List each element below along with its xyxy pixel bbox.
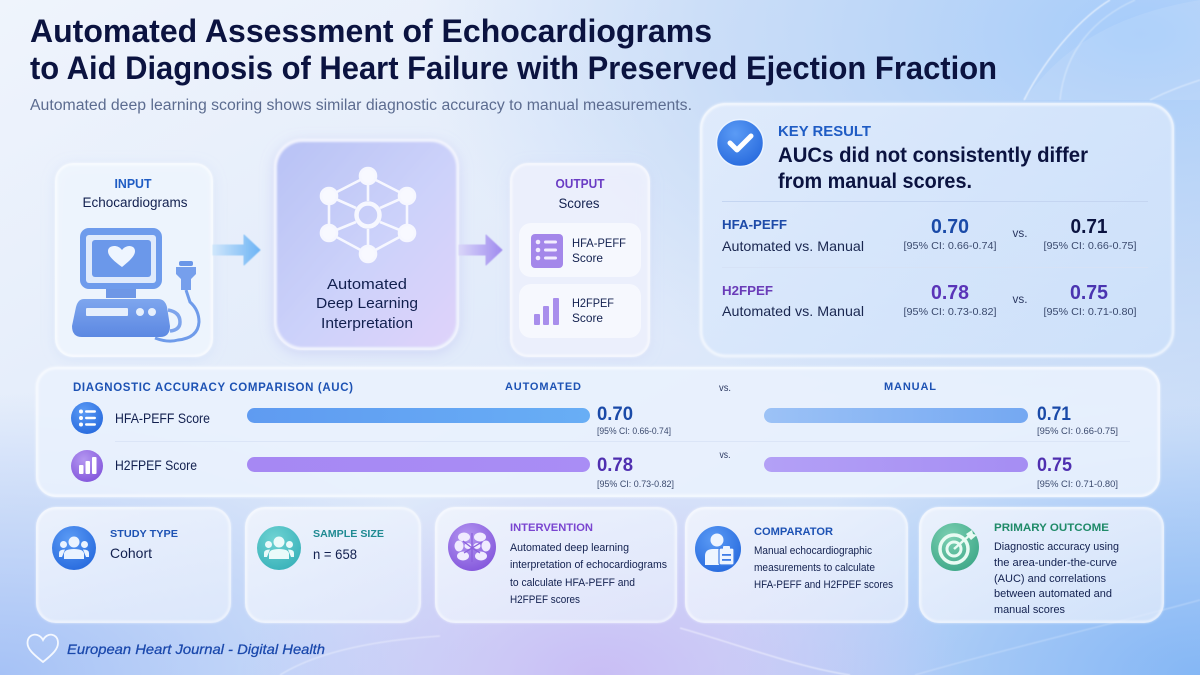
column heading: automated: AUTOMATED: [505, 381, 581, 393]
interpretation label: Deep Learning: [316, 295, 418, 312]
row: H2FPEF score bars: H2FPEF Score: [115, 458, 197, 473]
icon: people: [257, 526, 301, 570]
card: study type: Cohort: [110, 545, 152, 561]
row: HFA-PEFF score bars: [95% CI: 0.66-0.75]: [1037, 426, 1118, 437]
footer: journal: [28, 635, 325, 662]
icon: target: [931, 523, 979, 571]
key result statement: AUCs did not consistently differ: [778, 144, 1088, 167]
row: H2FPEF: [722, 282, 1137, 319]
title: [30, 13, 997, 86]
card: intervention: to calculate HFA-PEFF and: [510, 577, 635, 589]
arrow: input to interpretation: [213, 235, 260, 265]
row: HFA-PEFF: [95% CI: 0.66-0.75]: [1044, 240, 1137, 252]
card: comparator: Manual echocardiographic: [754, 545, 872, 557]
interpretation label: [316, 276, 418, 332]
icon: list: [71, 402, 103, 434]
row: H2FPEF: vs.: [1012, 292, 1028, 306]
panel: automated deep learning interpretation: [274, 139, 459, 353]
card: sample size: n = 658: [313, 546, 357, 562]
row: H2FPEF: Automated vs. Manual: [722, 303, 864, 319]
row: HFA-PEFF score bars: 0.71: [1037, 404, 1071, 425]
card: comparator: HFA-PEFF and H2FPEF scores: [754, 579, 893, 591]
row: HFA-PEFF score bars: [71, 402, 1118, 437]
card: primary outcome: manual scores: [994, 604, 1065, 616]
panel: diagnostic accuracy comparison: [36, 367, 1160, 497]
row: H2FPEF: 0.75: [1070, 282, 1108, 304]
output: H2FPEF score card: [519, 284, 641, 338]
column heading: manual: MANUAL: [884, 381, 936, 393]
row: H2FPEF: [95% CI: 0.71-0.80]: [1044, 306, 1137, 318]
output label: OUTPUT: [556, 177, 605, 191]
row: HFA-PEFF score bars: 0.70: [597, 404, 633, 425]
output: HFA-PEFF score card: HFA-PEFF: [572, 236, 626, 250]
card: intervention: H2FPEF scores: [510, 594, 580, 606]
row: H2FPEF score bars: [95% CI: 0.73-0.82]: [597, 479, 674, 490]
card: primary outcome: Diagnostic accuracy using: [994, 541, 1119, 553]
row: H2FPEF score bars: 0.75: [1037, 455, 1072, 476]
output: H2FPEF score card: H2FPEF: [572, 296, 614, 310]
row: H2FPEF score bars: [95% CI: 0.71-0.80]: [1037, 479, 1118, 490]
card: primary outcome: the area-under-the-curve: [994, 557, 1117, 569]
card: intervention: INTERVENTION: [510, 522, 593, 534]
row: H2FPEF score bars: [71, 449, 1118, 490]
interpretation label: Automated: [327, 276, 407, 293]
row: H2FPEF score bars: 0.78: [597, 455, 633, 476]
comparison heading: DIAGNOSTIC ACCURACY COMPARISON (AUC): [73, 382, 353, 394]
row: HFA-PEFF: [722, 216, 1137, 254]
card: primary outcome: PRIMARY OUTCOME: [994, 522, 1109, 534]
row: H2FPEF: H2FPEF: [722, 283, 773, 298]
card: intervention: interpretation of echocardiograms: [510, 559, 667, 571]
card: primary outcome: between automated and: [994, 588, 1112, 600]
row: H2FPEF: 0.78: [931, 282, 969, 304]
card: primary outcome: (AUC) and correlations: [994, 573, 1107, 585]
row: HFA-PEFF: HFA-PEFF: [722, 217, 787, 232]
output: H2FPEF score card: Score: [572, 311, 603, 325]
arrow: interpretation to output: [459, 235, 502, 265]
row: H2FPEF: [95% CI: 0.73-0.82]: [904, 306, 997, 318]
card: intervention: [435, 507, 677, 623]
card: sample size: SAMPLE SIZE: [313, 528, 384, 540]
input name: Echocardiograms: [82, 195, 188, 210]
title: to Aid Diagnosis of Heart Failure with Preserved Ejection Fraction: [30, 50, 997, 86]
icon: check mark: [716, 120, 764, 166]
key result label: KEY RESULT: [778, 124, 871, 140]
card: comparator: COMPARATOR: [754, 526, 833, 538]
key result statement: [778, 144, 1088, 193]
row: HFA-PEFF: Automated vs. Manual: [722, 238, 864, 254]
icon: clinician with clipboard: [695, 526, 741, 572]
row: H2FPEF score bars: vs.: [720, 449, 730, 461]
column separator: vs: vs.: [719, 382, 731, 394]
panel: key result: [700, 103, 1174, 357]
output: HFA-PEFF score card: [519, 223, 641, 277]
row: HFA-PEFF score bars: HFA-PEFF Score: [115, 411, 210, 426]
input label: INPUT: [114, 177, 152, 191]
key result statement: from manual scores.: [778, 170, 972, 193]
icon: bars: [71, 450, 103, 482]
row: HFA-PEFF: 0.71: [1070, 216, 1108, 238]
interpretation label: Interpretation: [321, 315, 413, 332]
card: intervention: Automated deep learning: [510, 542, 629, 554]
card: study type: [36, 507, 231, 623]
card: comparator: measurements to calculate: [754, 562, 875, 574]
subtitle: Automated deep learning scoring shows similar diagnostic accuracy to manual measurements.: [30, 97, 692, 114]
card: study type: STUDY TYPE: [110, 528, 178, 540]
footer: journal: European Heart Journal - Digital Health: [67, 641, 325, 657]
title: Automated Assessment of Echocardiograms: [30, 13, 712, 49]
row: HFA-PEFF score bars: [95% CI: 0.66-0.74]: [597, 426, 671, 437]
card: sample size: [245, 507, 421, 623]
icon: ultrasound machine: [72, 228, 199, 341]
icon: heart outline: [28, 635, 58, 662]
icon: neural network: [321, 168, 415, 262]
row: HFA-PEFF: 0.70: [931, 216, 969, 238]
panel: output: [510, 163, 650, 359]
panel: input: [55, 163, 213, 359]
row: HFA-PEFF: vs.: [1012, 226, 1028, 240]
output name: Scores: [558, 196, 600, 211]
icon: people: [52, 526, 96, 570]
card: comparator: [685, 507, 908, 623]
card: primary outcome: [919, 507, 1164, 623]
output: HFA-PEFF score card: Score: [572, 251, 603, 265]
icon: brain: [448, 523, 496, 571]
row: HFA-PEFF: [95% CI: 0.66-0.74]: [904, 240, 997, 252]
